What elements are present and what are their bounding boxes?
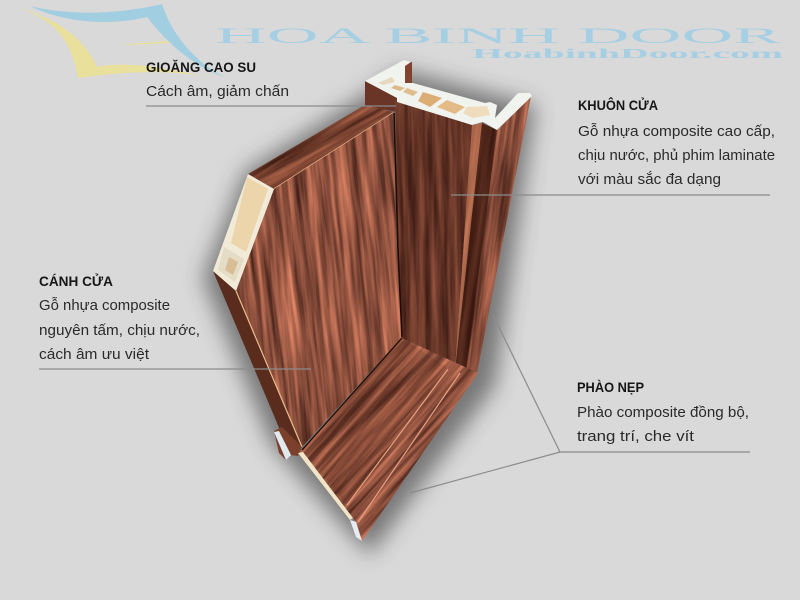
watermark text: HoabinhDoor.com [472, 47, 784, 62]
callout: khuôn cửa [451, 96, 775, 195]
frame right face [456, 97, 531, 372]
callout: phào nẹp: PHÀO NẸP [577, 379, 644, 395]
callout: khuôn cửa: chịu nước, phủ phim laminate [578, 147, 775, 164]
door assembly illustration [192, 59, 546, 562]
callout: phào nẹp: trang trí, che vít [577, 428, 695, 445]
frame profile top [365, 60, 532, 130]
door cut end [213, 174, 274, 291]
sill [300, 338, 478, 541]
logo watermark [20, 4, 224, 79]
door side face [213, 271, 301, 446]
watermark text [215, 23, 784, 62]
callout: khuôn cửa: Gỗ nhựa composite cao cấp, [578, 123, 775, 140]
frame jamb front [395, 100, 472, 362]
callout: gioăng cao su: Cách âm, giảm chấn [146, 83, 289, 100]
callout: cánh cửa: CÁNH CỬA [39, 272, 113, 289]
callout: cánh cửa [39, 272, 311, 369]
callout: cánh cửa: Gỗ nhựa composite [39, 297, 170, 314]
door top face [248, 105, 393, 189]
watermark text: HOA BINH DOOR [215, 23, 782, 48]
door front face [236, 113, 402, 446]
callout: gioăng cao su [146, 59, 396, 106]
callout: phào nẹp: Phào composite đồng bộ, [577, 404, 749, 421]
sill end profile [274, 427, 362, 541]
callout: khuôn cửa: KHUÔN CỬA [578, 96, 658, 113]
callout: phào nẹp [410, 315, 750, 493]
drop shadow [203, 70, 535, 555]
callout: khuôn cửa: với màu sắc đa dạng [578, 171, 721, 188]
callout: cánh cửa: nguyên tấm, chịu nước, [39, 322, 200, 339]
back jamb top [365, 62, 412, 112]
callout: gioăng cao su: GIOĂNG CAO SU [146, 59, 256, 75]
callout: cánh cửa: cách âm ưu việt [39, 346, 150, 363]
